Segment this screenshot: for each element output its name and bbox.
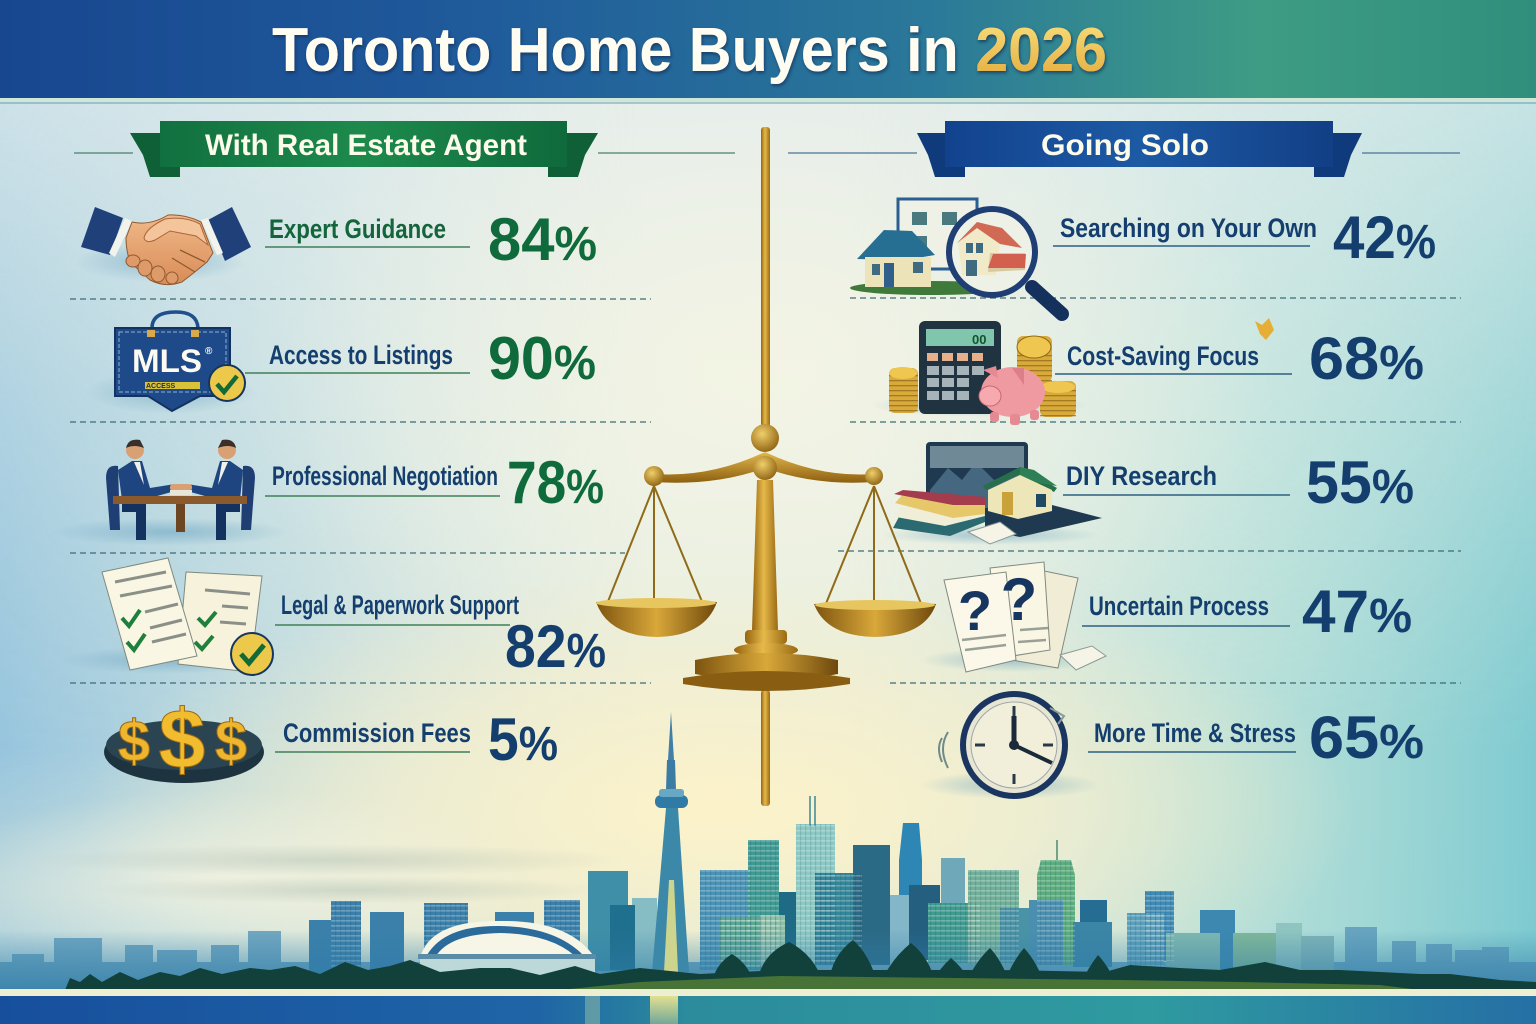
icon: dollar coins: $: [215, 709, 247, 774]
row: More Time & Stress: [920, 694, 1424, 799]
row: Expert Guidance: [75, 206, 597, 285]
ribbon: With Real Estate Agent: With Real Estate Agent: [205, 129, 527, 162]
row: Professional Negotiation: 78%: [507, 449, 604, 516]
icon: laptop, books and house: [880, 442, 1102, 545]
value: 84%: [488, 206, 597, 273]
row: Access to Listings: [85, 312, 596, 414]
icon: house and magnifier: [850, 199, 1062, 314]
row: Uncertain Process: Uncertain Process: [1089, 591, 1269, 621]
dome: [418, 921, 596, 987]
label: Expert Guidance: [269, 214, 446, 244]
icon: calculator, coins and piggy bank: 00: [972, 332, 986, 347]
row: Commission Fees: 5%: [488, 706, 558, 773]
icon: small crown mark: [1255, 318, 1274, 340]
row: DIY Research: [880, 442, 1414, 545]
row: Searching on Your Own: 42%: [1333, 204, 1436, 271]
row: Commission Fees: [104, 692, 558, 786]
icon: dollar coins: $: [159, 692, 205, 786]
beam: [654, 452, 874, 483]
row: Uncertain Process: 47%: [1302, 578, 1412, 645]
icon: MLS badge: ACCESS: [146, 383, 176, 390]
row: Professional Negotiation: [50, 440, 604, 546]
icon: clock: [920, 694, 1100, 799]
row: Legal & Paperwork Support: 82%: [505, 613, 606, 680]
row: Cost-Saving Focus: 68%: [1309, 325, 1424, 392]
row: Access to Listings: 90%: [488, 325, 596, 392]
icon: question papers: ?: [958, 579, 992, 642]
scale: [596, 127, 936, 806]
ribbon: Going Solo: Going Solo: [1041, 129, 1209, 162]
ribbon: With Real Estate Agent: [74, 121, 735, 177]
skyline: [0, 712, 1536, 990]
waterfront: [0, 989, 1536, 1024]
icon: handshake: [75, 207, 251, 285]
row: Commission Fees: Commission Fees: [283, 718, 471, 748]
cn tower: [652, 712, 689, 972]
row: Uncertain Process: [920, 562, 1412, 672]
row: Access to Listings: Access to Listings: [269, 340, 453, 370]
icon: MLS badge: ®: [205, 346, 213, 357]
treeline: [65, 940, 1536, 990]
row: More Time & Stress: More Time & Stress: [1094, 718, 1296, 748]
icon: question papers: ?: [1001, 566, 1037, 633]
icon: MLS badge: [85, 312, 255, 414]
title: Toronto Home Buyers in 2026: [272, 16, 1107, 85]
row: Cost-Saving Focus: [870, 318, 1424, 425]
row: Searching on Your Own: [850, 199, 1436, 314]
row: Cost-Saving Focus: Cost-Saving Focus: [1067, 341, 1259, 371]
icon: dollar coins: $: [118, 709, 150, 774]
icon: negotiation: [50, 440, 290, 546]
row: Professional Negotiation: Professional Negotiation: [272, 461, 498, 491]
icon: MLS badge: MLS: [132, 343, 202, 379]
icon: question papers: [920, 562, 1106, 672]
title banner: [0, 0, 1536, 104]
ribbon: Going Solo: [788, 121, 1460, 177]
icon: paperwork: [60, 558, 280, 675]
row: Searching on Your Own: Searching on Your Own: [1060, 213, 1317, 243]
row: Legal & Paperwork Support: [60, 558, 606, 680]
row: DIY Research: DIY Research: [1066, 461, 1217, 491]
icon: calculator, coins and piggy bank: [870, 321, 1090, 425]
row: Legal & Paperwork Support: Legal & Paperwork Support: [281, 590, 519, 620]
icon: dollar coins: [104, 692, 264, 786]
row: More Time & Stress: 65%: [1309, 704, 1424, 771]
row: DIY Research: 55%: [1306, 449, 1414, 516]
